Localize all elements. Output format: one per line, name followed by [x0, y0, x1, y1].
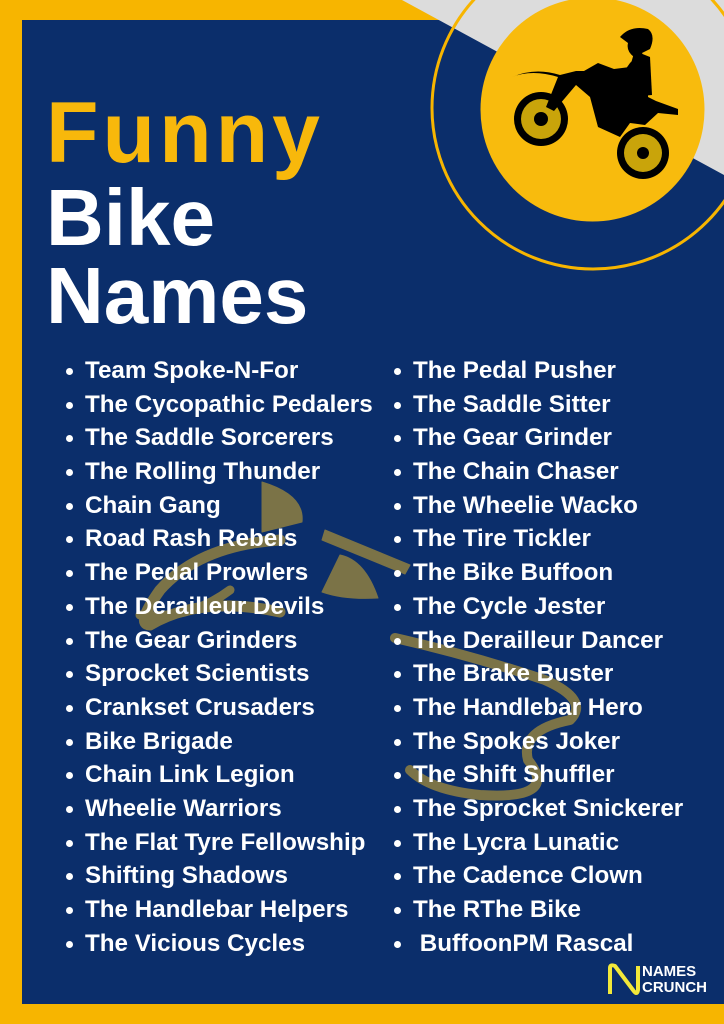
list: left column: The Handlebar Helpers [85, 896, 348, 923]
logo: names crunch: CRUNCH [642, 979, 707, 996]
list: left column: Road Rash Rebels [85, 525, 297, 552]
list: right column: The Shift Shuffler [413, 761, 615, 788]
list: left column: Crankset Crusaders [85, 694, 315, 721]
list: right column: The Lycra Lunatic [413, 829, 619, 856]
title: Funny [46, 85, 324, 181]
icon: dirt bike rider [512, 28, 678, 179]
list: right column: The Saddle Sitter [413, 391, 611, 418]
list: right column: BuffoonPM Rascal [420, 930, 633, 957]
list: right column: The Brake Buster [413, 660, 613, 687]
list: right column: The Chain Chaser [413, 458, 619, 485]
list: right column: The Bike Buffoon [413, 559, 613, 586]
list: left column [66, 357, 373, 957]
list: left column: The Cycopathic Pedalers [85, 391, 373, 418]
list: left column: The Derailleur Devils [85, 593, 324, 620]
list: right column: The Gear Grinder [413, 424, 612, 451]
grey triangle [402, 0, 724, 175]
list: right column: The Cadence Clown [413, 862, 643, 889]
list: left column: Shifting Shadows [85, 862, 288, 889]
list: left column: Bike Brigade [85, 728, 233, 755]
list: left column: The Saddle Sorcerers [85, 424, 334, 451]
list: right column [394, 357, 683, 957]
title: Bike [46, 173, 215, 262]
watermark bike [140, 482, 576, 796]
list: left column: The Rolling Thunder [85, 458, 320, 485]
list: left column: The Flat Tyre Fellowship [85, 829, 365, 856]
list: left column: Chain Link Legion [85, 761, 295, 788]
list: left column: Sprocket Scientists [85, 660, 310, 687]
title [46, 85, 324, 340]
logo: names crunch [608, 963, 707, 996]
list: right column: The RThe Bike [413, 896, 581, 923]
list: right column: The Spokes Joker [413, 728, 620, 755]
list: left column: The Gear Grinders [85, 626, 297, 654]
list: right column: The Pedal Pusher [413, 357, 616, 384]
list: left column: Chain Gang [85, 492, 221, 519]
list: left column: Team Spoke-N-For [85, 357, 298, 384]
list: right column: The Derailleur Dancer [413, 626, 663, 654]
list: left column: Wheelie Warriors [85, 795, 282, 822]
list: right column: The Handlebar Hero [413, 694, 643, 721]
list: left column: The Vicious Cycles [85, 930, 305, 957]
list: left column: The Pedal Prowlers [85, 559, 308, 586]
badge: motorbike circle [480, 0, 704, 222]
list: right column: The Wheelie Wacko [413, 492, 638, 519]
list: right column: The Sprocket Snickerer [413, 795, 683, 822]
logo: names crunch: NAMES [642, 963, 696, 980]
list: right column: The Tire Tickler [413, 525, 591, 552]
decorative ring [432, 0, 724, 269]
list: right column: The Cycle Jester [413, 593, 605, 620]
title: Names [46, 251, 308, 340]
